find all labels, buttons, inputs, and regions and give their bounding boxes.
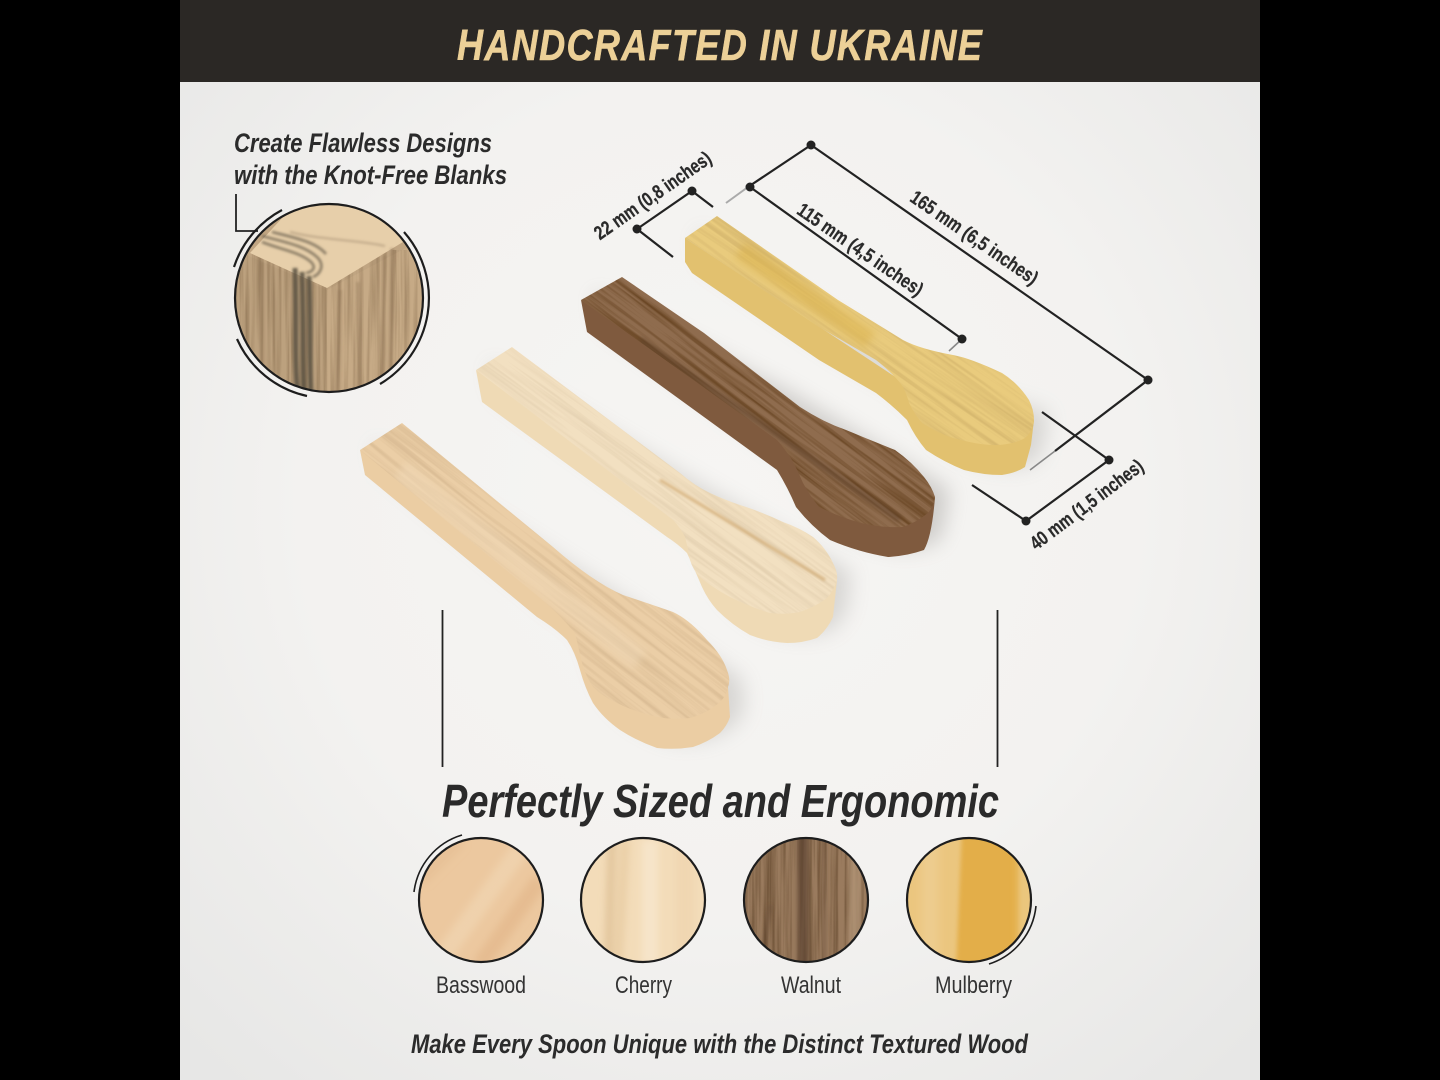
header band [180, 0, 1260, 82]
text block: knot-free heading [234, 128, 507, 190]
swatch: cherry [580, 835, 710, 999]
spoon: mulberry [685, 216, 1052, 475]
dimension: 165 mm length: 165 mm (6,5 inches) [906, 186, 1042, 290]
swatch: walnut: Walnut [781, 972, 841, 999]
swatch: walnut [740, 835, 870, 999]
dimension: 115 mm length [746, 182, 966, 351]
text block: knot-free heading: Create Flawless Designs [234, 128, 492, 158]
dimension: 115 mm length: 115 mm (4,5 inches) [793, 199, 927, 301]
spoon: cherry [476, 347, 855, 643]
spoon: walnut [581, 277, 955, 557]
swatch: cherry: Cherry [615, 972, 672, 999]
dimension: 22 mm width [590, 147, 716, 257]
tagline: Make Every Spoon Unique with the Distinct Textured Wood [411, 1029, 1028, 1059]
callout: wood close-up circle [230, 194, 430, 400]
panel: background [180, 0, 1260, 1080]
title: HANDCRAFTED IN UKRAINE [457, 21, 983, 70]
heading: perfectly sized: Perfectly Sized and Ergonomic [442, 775, 999, 827]
spoon: basswood [360, 423, 749, 749]
dimension: 40 mm bowl width [972, 412, 1148, 555]
dimension: 40 mm bowl width: 40 mm (1,5 inches) [1026, 455, 1148, 555]
swatch: basswood: Basswood [436, 972, 526, 999]
swatch: mulberry [906, 836, 1037, 998]
swatch: basswood [414, 835, 545, 999]
heading: perfectly sized [442, 610, 999, 827]
swatch: mulberry: Mulberry [935, 972, 1012, 999]
dimension: 22 mm width: 22 mm (0,8 inches) [590, 147, 716, 245]
dimension: 165 mm length [726, 140, 1152, 470]
text block: knot-free heading: with the Knot-Free Blanks [234, 160, 507, 190]
